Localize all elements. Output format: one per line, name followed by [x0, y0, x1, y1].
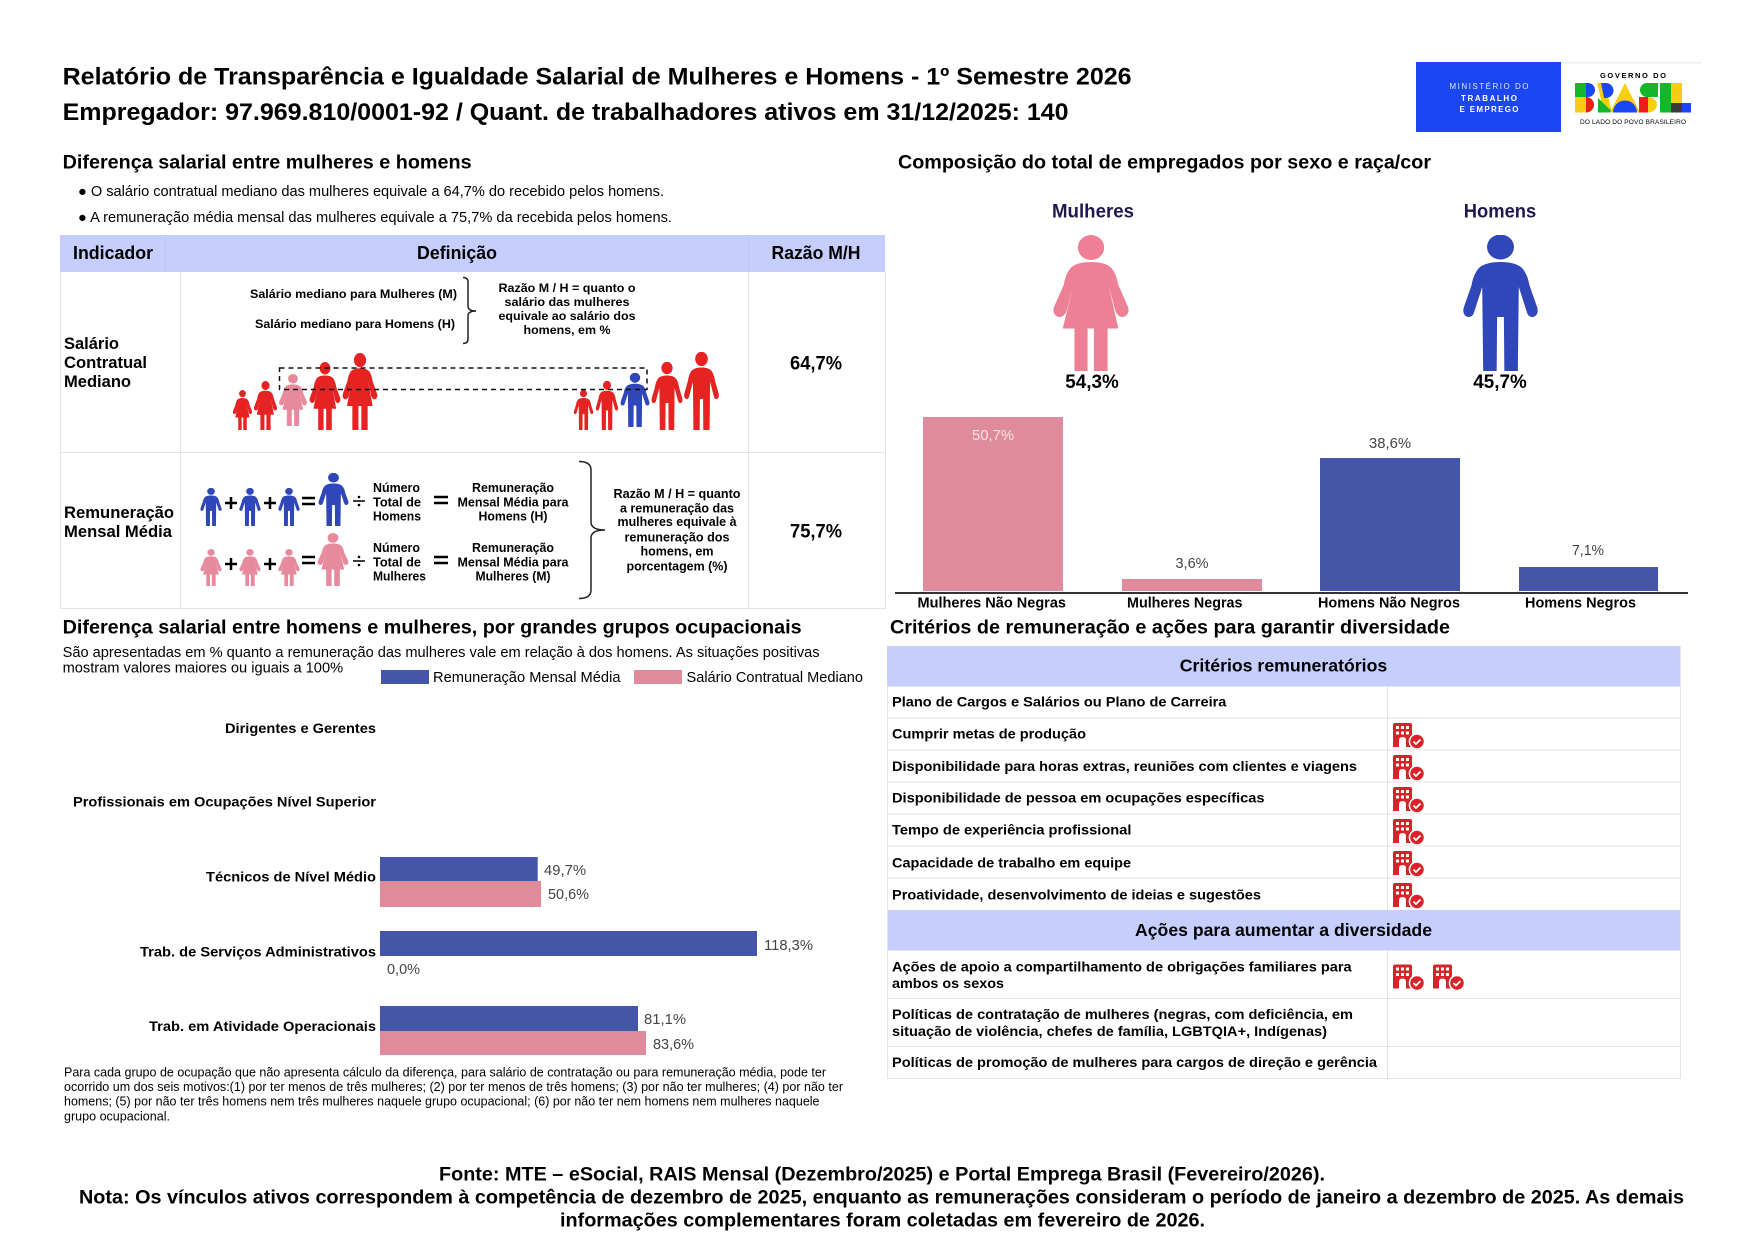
- panel: tabela de critérios: [887, 646, 1680, 1078]
- panel: tabela de indicadores: [60, 235, 886, 608]
- bar chart: grupos ocupacionais: [73, 720, 813, 1055]
- panel: mulheres: 54,3%: [1065, 372, 1119, 393]
- action rows: ambos os sexos: [892, 975, 1004, 991]
- equation: mulheres: Número: [373, 541, 420, 555]
- heading: diferença salarial: Diferença salarial entre mulheres e homens: [63, 153, 472, 174]
- bar chart: grupos ocupacionais: Dirigentes e Gerentes: [225, 720, 376, 736]
- bar chart: composição por raça/cor: Mulheres Negras: [1127, 596, 1242, 612]
- equation: mulheres: Mulheres (M): [476, 570, 550, 584]
- value: 75,7%: 75,7%: [790, 522, 842, 542]
- title: [63, 64, 1132, 126]
- value: 64,7%: 64,7%: [790, 354, 842, 374]
- row label: remuneração mensal média: [64, 504, 174, 541]
- panel: homens: [1463, 202, 1538, 393]
- footnote: [64, 1066, 843, 1124]
- equation: mulheres: Remuneração: [472, 541, 554, 555]
- action rows: Políticas de promoção de mulheres para cargos de direção e gerência: [892, 1054, 1377, 1070]
- brace and razão text: a remuneração das: [620, 502, 734, 516]
- equation: mulheres: Total de: [373, 556, 421, 570]
- row label: salário contratual mediano: Contratual: [64, 354, 147, 372]
- bar chart: composição por raça/cor: Homens Negros: [1525, 596, 1636, 612]
- definition: salário mediano: equivale ao salário dos: [498, 309, 636, 323]
- brace and razão text: mulheres equivale à: [618, 515, 737, 529]
- bar chart: composição por raça/cor: 38,6%: [1369, 436, 1411, 452]
- bar chart: grupos ocupacionais: 81,1%: [644, 1012, 686, 1028]
- legend: Remuneração Mensal Média: [433, 670, 621, 686]
- legend: Salário Contratual Mediano: [686, 670, 863, 686]
- bar chart: grupos ocupacionais: Técnicos de Nível Médio: [206, 868, 376, 884]
- brace and razão text: Razão M / H = quanto: [614, 487, 741, 501]
- icons: critérios adotados: [1393, 723, 1424, 909]
- bar chart: composição por raça/cor: 3,6%: [1176, 556, 1209, 572]
- figures: mediana homens: [574, 352, 719, 430]
- equation: mulheres: Mensal Média para: [458, 556, 570, 570]
- equation: homens: [200, 473, 570, 526]
- equation: homens: Homens: [373, 510, 421, 524]
- definition: salário mediano: [250, 278, 636, 344]
- action rows: Políticas de contratação de mulheres (negras, com deficiência, em: [892, 1006, 1353, 1022]
- bullet: salário contratual: ● O salário contratual mediano das mulheres equivale a 64,7% do recebido pelos homens.: [78, 184, 664, 200]
- bar chart: grupos ocupacionais: Trab. em Atividade Operacionais: [149, 1018, 376, 1034]
- footnote: grupo ocupacional.: [64, 1110, 170, 1124]
- equation: homens: Mensal Média para: [458, 496, 570, 510]
- bar chart: grupos ocupacionais: 118,3%: [764, 938, 813, 954]
- header: critérios remuneratórios: Critérios remuneratórios: [1180, 656, 1388, 676]
- footnote: homens; (5) por não ter três homens nem três mulheres naquele grupo ocupacional; (6) por não ter nem homens nem mulheres naquele: [64, 1094, 820, 1108]
- panel: homens: 45,7%: [1473, 372, 1527, 393]
- icon: homem: [1463, 234, 1538, 371]
- definition: salário mediano: salário das mulheres: [504, 295, 630, 309]
- header: ações: Ações para aumentar a diversidade: [1135, 920, 1432, 940]
- definition: salário mediano: Salário mediano para Mulheres (M): [250, 287, 457, 301]
- equation: mulheres: Mulheres: [373, 570, 426, 584]
- criteria rows: Plano de Cargos e Salários ou Plano de Carreira: [892, 694, 1227, 710]
- text: explicação do gráfico: [63, 645, 820, 676]
- bar chart: composição por raça/cor: 50,7%: [972, 428, 1014, 444]
- equation: homens: Homens (H): [478, 510, 548, 524]
- bar chart: grupos ocupacionais: Profissionais em Ocupações Nível Superior: [73, 794, 377, 810]
- equation: homens: Total de: [373, 496, 421, 510]
- bar chart: grupos ocupacionais: 49,7%: [544, 863, 586, 879]
- legend: [381, 670, 863, 686]
- criteria rows: [892, 694, 1357, 902]
- bar chart: grupos ocupacionais: 83,6%: [653, 1037, 694, 1053]
- brace and razão text: porcentagem (%): [626, 560, 728, 574]
- logo: ministério e governo: GOVERNO DO: [1600, 71, 1666, 80]
- bar chart: grupos ocupacionais: Trab. de Serviços Administrativos: [140, 944, 376, 960]
- criteria rows: Disponibilidade de pessoa em ocupações específicas: [892, 790, 1265, 806]
- heading: composição: Composição do total de empregados por sexo e raça/cor: [898, 153, 1432, 174]
- footnote: ocorrido um dos seis motivos:(1) por ter menos de três mulheres; (2) por ter menos de três homens; (3) por não ter mulheres; (4) por não ter: [64, 1080, 843, 1094]
- bar chart: composição por raça/cor: [895, 417, 1688, 612]
- action rows: situação de violência, chefes de família, LGBTQIA+, Indígenas): [892, 1023, 1327, 1039]
- source and note: [79, 1164, 1684, 1232]
- panel: homens: Homens: [1464, 202, 1536, 222]
- criteria rows: Proatividade, desenvolvimento de ideias e sugestões: [892, 886, 1261, 902]
- text: explicação do gráfico: mostram valores maiores ou iguais a 100%: [63, 660, 343, 676]
- row label: remuneração mensal média: Mensal Média: [64, 523, 173, 541]
- criteria rows: Cumprir metas de produção: [892, 726, 1086, 742]
- bullet: remuneração média: ● A remuneração média mensal das mulheres equivale a 75,7% da recebida pelos homens.: [78, 210, 672, 226]
- logo: ministério e governo: [1416, 62, 1702, 132]
- logo: ministério e governo: MINISTÉRIO DO: [1450, 82, 1528, 91]
- definition: salário mediano: Salário mediano para Homens (H): [255, 317, 455, 331]
- brace and razão text: remuneração dos: [624, 530, 730, 544]
- bar chart: composição por raça/cor: Homens Não Negros: [1318, 596, 1460, 612]
- definition: salário mediano: Razão M / H = quanto o: [498, 281, 636, 295]
- logo: ministério e governo: E EMPREGO: [1460, 105, 1518, 114]
- criteria rows: Capacidade de trabalho em equipe: [892, 854, 1131, 870]
- equation: mulheres: [200, 533, 570, 586]
- source and note: informações complementares foram coletadas em fevereiro de 2026.: [560, 1210, 1205, 1232]
- heading: grupos ocupacionais: Diferença salarial entre homens e mulheres, por grandes grupos ocupacionais: [63, 618, 802, 639]
- source and note: Fonte: MTE – eSocial, RAIS Mensal (Dezembro/2025) e Portal Emprega Brasil (Fevereiro/2026).: [439, 1164, 1325, 1186]
- criteria rows: Tempo de experiência profissional: [892, 822, 1131, 838]
- dashed median box: [280, 368, 647, 390]
- bar chart: composição por raça/cor: 7,1%: [1572, 543, 1604, 559]
- panel: mulheres: [1052, 202, 1134, 393]
- brace and razão text: homens, em: [640, 544, 714, 558]
- bar chart: grupos ocupacionais: 0,0%: [387, 962, 420, 978]
- table header: Razão M/H: [772, 243, 860, 263]
- action rows: Ações de apoio a compartilhamento de obrigações familiares para: [892, 958, 1352, 974]
- logo: ministério e governo: DO LADO DO POVO BRASILEIRO: [1580, 119, 1686, 126]
- row label: salário contratual mediano: Salário: [64, 335, 119, 353]
- text: explicação do gráfico: São apresentadas em % quanto a remuneração das mulheres vale em relação à dos homens. As situações positivas: [63, 645, 820, 661]
- table header: [73, 243, 860, 263]
- logo: ministério e governo: TRABALHO: [1461, 94, 1517, 103]
- icons: ações adotadas: [1393, 964, 1464, 990]
- equation: homens: Remuneração: [472, 481, 554, 495]
- row label: salário contratual mediano: [64, 335, 147, 391]
- bar chart: composição por raça/cor: Mulheres Não Negras: [918, 596, 1066, 612]
- bar chart: grupos ocupacionais: 50,6%: [548, 887, 589, 903]
- icon: mulher: [1053, 235, 1129, 371]
- source and note: Nota: Os vínculos ativos correspondem à competência de dezembro de 2025, enquanto as remunerações consideram o período de janeiro a dezembro de 2025. As demais: [79, 1188, 1684, 1208]
- action rows: [892, 958, 1377, 1070]
- row label: remuneração mensal média: Remuneração: [64, 504, 174, 522]
- table header: Indicador: [73, 243, 153, 263]
- footnote: Para cada grupo de ocupação que não apresenta cálculo da diferença, para salário de contratação ou para remuneração média, pode ter: [64, 1066, 826, 1080]
- table header: Definição: [417, 243, 497, 263]
- panel: mulheres: Mulheres: [1052, 202, 1134, 222]
- heading: critérios: Critérios de remuneração e ações para garantir diversidade: [890, 618, 1450, 639]
- brace and razão text: [579, 462, 741, 598]
- equation: homens: Número: [373, 481, 420, 495]
- title: Relatório de Transparência e Igualdade Salarial de Mulheres e Homens - 1º Semestre 2026: [63, 64, 1132, 90]
- definition: salário mediano: homens, em %: [524, 323, 611, 337]
- figures: mediana mulheres: [233, 353, 377, 430]
- row label: salário contratual mediano: Mediano: [64, 373, 131, 391]
- title: Empregador: 97.969.810/0001-92 / Quant. de trabalhadores ativos em 31/12/2025: 140: [63, 99, 1069, 126]
- criteria rows: Disponibilidade para horas extras, reuniões com clientes e viagens: [892, 758, 1357, 774]
